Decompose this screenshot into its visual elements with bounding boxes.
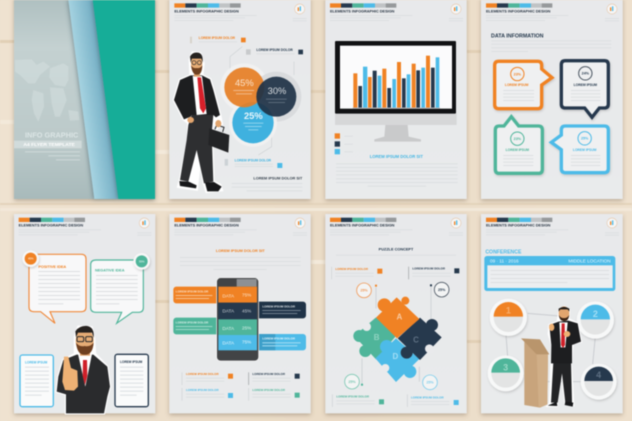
callout: orange: LOREM IPSUM: [505, 83, 529, 87]
phone: [217, 278, 259, 361]
legend item: blue: LOREM IPSUM DOLOR: [186, 388, 220, 392]
header: [174, 3, 307, 21]
puzzle: [353, 297, 442, 382]
header: ELEMENTS INFOGRAPHIC DESIGN: [486, 9, 551, 13]
cover subtitle band: [14, 141, 82, 148]
label: top orange: LOREM IPSUM DOLOR: [199, 36, 236, 40]
legend item: orange: LOREM IPSUM DOLOR: [186, 372, 220, 376]
event box: 09 · 11 · 2016: [490, 258, 519, 263]
label: orange: [331, 267, 382, 279]
podium: [521, 338, 549, 408]
cover title: INFO GRAPHIC: [25, 131, 79, 140]
cover subtitle band: A4 FLYER TEMPLATE: [23, 142, 76, 148]
callout: blue: [551, 126, 608, 173]
legend item: orange: [182, 372, 233, 385]
label: bottom blue: LOREM IPSUM DOLOR: [235, 158, 272, 162]
panel: data information: [481, 0, 623, 199]
label: top orange: [190, 36, 246, 43]
header: ELEMENTS INFOGRAPHIC DESIGN: [330, 224, 395, 228]
panel: monitor bar chart: [325, 0, 467, 199]
world map: [15, 59, 79, 122]
label: blue: [407, 394, 459, 407]
side tab: blue: [255, 334, 306, 350]
label: teal: LOREM IPSUM DOLOR: [336, 395, 370, 399]
legend item: blue: [182, 388, 233, 401]
percentage circles: 30%: [268, 86, 286, 96]
callout: navy: [561, 61, 608, 117]
step 4: [581, 364, 617, 400]
text box: navy: LOREM IPSUM: [120, 360, 143, 364]
businessman walking: [174, 52, 229, 192]
header: ELEMENTS INFOGRAPHIC DESIGN: [174, 9, 239, 13]
panel: conference: [481, 214, 623, 413]
label: orange: LOREM IPSUM DOLOR: [335, 267, 369, 271]
percentage circles: 25%: [244, 111, 263, 121]
callout: orange: [495, 61, 552, 109]
closing text: [232, 177, 303, 191]
piece A: A: [396, 313, 402, 322]
event box: MIDDLE LOCATION: [568, 258, 611, 263]
side tab: teal: [173, 318, 220, 334]
blue diagonal strip: [68, 0, 118, 199]
callout: teal: LOREM IPSUM: [506, 148, 529, 152]
intro text: [180, 257, 301, 270]
callout: orange: 23%: [514, 72, 522, 76]
legend item: teal: LOREM IPSUM DOLOR: [252, 388, 286, 392]
legend item: teal: [248, 388, 300, 401]
speech bubble: positive idea: 45%: [28, 257, 34, 261]
speech bubble: negative idea: [91, 253, 150, 323]
step 3: [488, 355, 524, 391]
percentage markers: 25%: [438, 288, 446, 292]
label: bottom blue: [225, 158, 282, 168]
label: top navy: [246, 48, 303, 55]
closing text: LOREM IPSUM DOLOR SIT: [253, 177, 303, 181]
businessman presenting: [548, 306, 581, 407]
piece B: B: [374, 333, 380, 342]
label: teal: [332, 394, 384, 407]
step 2: [577, 301, 614, 339]
legend item: navy: [248, 372, 300, 385]
legend: [335, 133, 353, 154]
label: navy: [408, 266, 459, 279]
side tab: orange: LOREM IPSUM DOLOR: [176, 289, 209, 293]
callout: teal: [495, 117, 542, 173]
callout: navy: 24%: [582, 72, 590, 76]
percentage markers: 25%: [348, 380, 356, 384]
callout: blue: 25%: [581, 137, 589, 141]
percentage markers: [345, 282, 449, 390]
percentage markers: 25%: [426, 381, 434, 385]
businessman thumbs up: [57, 326, 110, 413]
panel: cover flyer: [14, 0, 155, 199]
phone: DATA: [222, 293, 235, 298]
event box: [484, 256, 615, 291]
cover small text: [25, 151, 80, 160]
phone: DATA: [222, 309, 235, 314]
text box: blue: LOREM IPSUM: [25, 361, 48, 365]
callout: navy: LOREM IPSUM: [574, 83, 597, 87]
panel: ideas with thumbs-up man: [14, 214, 155, 413]
step 1: [490, 299, 527, 336]
header: [19, 218, 151, 236]
phone: 45%: [242, 308, 251, 313]
bar chart: [353, 56, 440, 108]
panel: businessman with percentages: [169, 0, 311, 199]
callout: teal: 23%: [514, 137, 522, 141]
header: [486, 218, 619, 236]
panel: phone data list: [169, 214, 311, 413]
piece C: C: [413, 336, 419, 345]
heading: LOREM IPSUM DOLOR SIT: [216, 249, 265, 253]
text box: navy: [115, 354, 148, 407]
step 1: 1: [506, 305, 511, 315]
label: navy: LOREM IPSUM DOLOR: [412, 266, 446, 270]
side tab: orange: [173, 287, 220, 303]
label: top navy: LOREM IPSUM DOLOR: [256, 48, 293, 52]
header: [174, 218, 307, 236]
step 4: 4: [596, 370, 601, 380]
intro text: [491, 40, 611, 52]
step 2: 2: [593, 309, 598, 319]
teal diagonal panel: [93, 0, 155, 199]
phone: DATA: [222, 340, 235, 345]
legend item: navy: LOREM IPSUM DOLOR: [252, 372, 286, 376]
header: [330, 218, 463, 236]
side tab: blue: LOREM IPSUM DOLOR: [262, 337, 296, 341]
text box: blue: [20, 355, 53, 407]
heading: CONFERENCE: [485, 249, 522, 255]
phone: 25%: [242, 326, 251, 331]
speech bubble: positive idea: [22, 250, 86, 323]
phone: 75%: [242, 293, 251, 298]
header: [486, 3, 619, 21]
percentage circles: 45%: [235, 78, 254, 88]
header: ELEMENTS INFOGRAPHIC DESIGN: [19, 224, 83, 228]
phone: DATA: [222, 326, 235, 331]
percentage circles: [220, 63, 301, 147]
header: ELEMENTS INFOGRAPHIC DESIGN: [174, 224, 239, 228]
header: [330, 3, 463, 21]
speech bubble: positive idea: POSITIVE IDEA: [38, 265, 66, 269]
phone: 75%: [242, 340, 251, 345]
monitor: [335, 41, 457, 142]
header: ELEMENTS INFOGRAPHIC DESIGN: [486, 224, 551, 228]
side tab: navy: LOREM IPSUM DOLOR: [262, 304, 296, 308]
piece D: D: [392, 352, 398, 361]
header: ELEMENTS INFOGRAPHIC DESIGN: [330, 9, 395, 13]
label: blue: LOREM IPSUM DOLOR: [411, 395, 445, 399]
heading: PUZZLE CONCEPT: [379, 247, 414, 251]
heading: LOREM IPSUM DOLOR SIT: [370, 154, 423, 159]
side tab: navy: [255, 302, 306, 318]
step 3: 3: [503, 362, 508, 372]
side tab: teal: LOREM IPSUM DOLOR: [176, 320, 209, 324]
heading: DATA INFORMATION: [491, 33, 544, 39]
speech bubble: negative idea: NEGATIVE IDEA: [95, 269, 125, 273]
speech bubble: negative idea: 55%: [139, 259, 145, 263]
panel: puzzle concept: [325, 214, 467, 413]
callout: blue: LOREM IPSUM: [573, 148, 597, 152]
percentage markers: 25%: [360, 289, 368, 293]
body text: [336, 163, 458, 187]
